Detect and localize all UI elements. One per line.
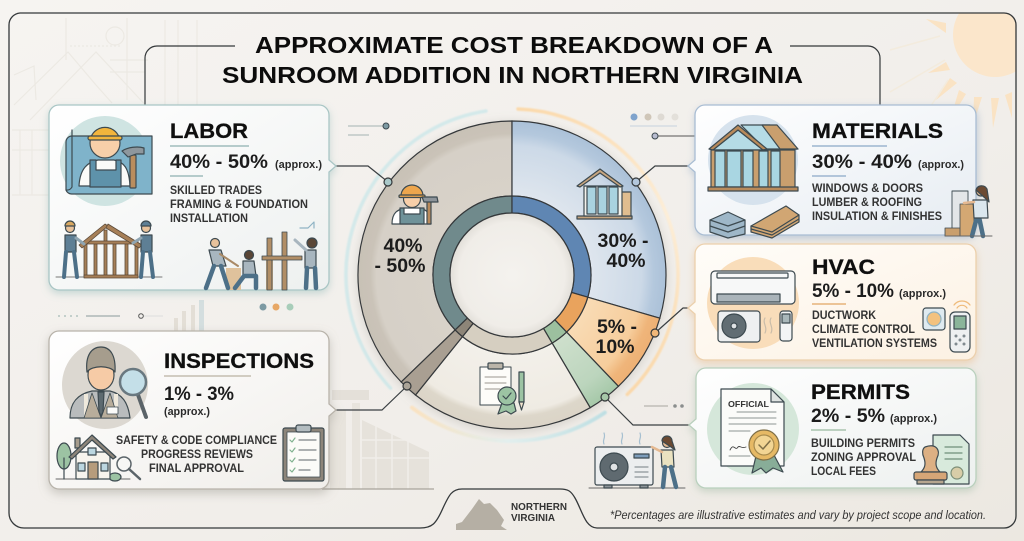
percentage: hvac [812,281,946,302]
segment: permits [552,332,618,408]
donut icon: sunroom house [577,169,632,219]
text: inspections items: PROGRESS REVIEWS [141,449,253,461]
title [222,32,803,88]
background house sketch [12,18,197,195]
badge: Northern Virginia: NORTHERN [511,502,567,513]
percentage: permits: 2% - 5% [811,406,885,427]
icon: house with magnifier [56,435,140,481]
percentage: labor: 40% - 50% [170,152,268,173]
donut label: materials [598,230,648,272]
text: inspections items: SAFETY & CODE COMPLIANCE [116,435,277,447]
donut icon: clipboard and ribbon [480,363,524,414]
segment: labor [358,121,512,382]
connectors [330,166,695,425]
segment: inspections [416,337,590,429]
center hole [450,213,574,337]
text: labor items [170,185,308,225]
text: labor items: SKILLED TRADES [170,185,262,197]
segment: hvac [567,297,660,386]
inner ring [433,196,591,354]
small bar decoration [174,300,204,331]
icon: inspector with magnifier [62,341,148,429]
panel: materials [688,105,992,238]
donut label: labor: 40% [383,235,423,257]
donut icon: worker [392,185,438,224]
text: permits items: LOCAL FEES [811,466,876,478]
percentage: hvac: 5% - 10% [812,281,894,302]
donut label: hvac: 5% - [597,316,637,338]
text: permits items [811,438,916,478]
icon: stamp and document [914,435,969,484]
illustration: outdoor HVAC unit with person [589,433,685,488]
heading: permits: PERMITS [811,381,910,404]
text: hvac items: DUCTWORK [812,310,877,322]
percentage: labor [170,152,322,173]
donut label: labor: - 50% [375,255,425,277]
text: hvac items: CLIMATE CONTROL [812,324,915,336]
percentage: permits [811,406,937,427]
permits card background [689,368,976,488]
materials card background [688,105,976,235]
illustration: workers building wall [206,222,317,290]
icon: material stacks [710,206,799,238]
icon: inspection clipboard [283,425,324,481]
percentage: hvac: (approx.) [899,288,946,300]
badge: Northern Virginia [456,499,567,530]
percentage: inspections: (approx.) [164,406,210,418]
text: labor items: FRAMING & FOUNDATION [170,199,308,211]
sun [890,14,1016,128]
illustration: person carrying materials [945,186,992,236]
panel: hvac [688,244,976,360]
text: inspections items [116,435,277,475]
text: materials items: INSULATION & FINISHES [812,211,942,223]
text: hvac items [812,310,937,350]
text: materials items [812,183,942,223]
footnote: *Percentages are illustrative estimates and vary by project scope and location. [610,510,986,522]
decorative dots and ticks [58,114,695,408]
hvac card background [688,244,976,360]
icon: sunroom [708,115,798,205]
icon: Virginia map [456,499,507,530]
percentage: materials: (approx.) [918,159,964,171]
connector nodes [384,178,659,401]
icon: thermostat and remote [923,301,970,352]
donut label: materials: 30% - [598,230,648,252]
text: hvac items: VENTILATION SYSTEMS [812,338,937,350]
text: inspections items: FINAL APPROVAL [149,463,244,475]
heading: labor: LABOR [170,120,248,143]
text: materials items: WINDOWS & DOORS [812,183,923,195]
donut chart [358,121,666,429]
illustration: workers framing a house [56,221,162,278]
text: permits items: ZONING APPROVAL [811,452,916,464]
text: materials items: LUMBER & ROOFING [812,197,922,209]
inspections card background [49,331,336,489]
percentage: inspections: 1% - 3% [164,384,234,405]
title bracket [145,46,880,105]
icon: worker on blueprint [60,116,152,206]
segment: other sliver [401,330,462,395]
icon: official document with seal [707,383,799,475]
title: APPROXIMATE COST BREAKDOWN OF A [255,32,773,58]
heading: inspections: INSPECTIONS [164,350,314,373]
donut label: hvac [595,316,637,358]
text: labor items: INSTALLATION [170,213,248,225]
background building sketch [322,390,434,489]
donut label: labor [375,235,425,277]
labor card background [49,105,336,290]
percentage: materials [812,152,964,173]
title: SUNROOM ADDITION IN NORTHERN VIRGINIA [222,62,803,88]
percentage: labor: (approx.) [275,159,322,171]
percentage: permits: (approx.) [890,413,937,425]
panel: inspections [49,331,336,489]
heading: materials: MATERIALS [812,120,943,143]
icon: air conditioner [707,257,799,349]
donut label: materials: 40% [606,250,646,272]
percentage: materials: 30% - 40% [812,152,912,173]
panel: permits [689,368,976,488]
donut label: hvac: 10% [595,336,635,358]
segment: materials [512,121,666,318]
badge: Northern Virginia: VIRGINIA [511,513,555,524]
percentage: inspections [164,384,234,418]
heading: hvac: HVAC [812,256,875,279]
text: permits items: BUILDING PERMITS [811,438,915,450]
icon: official document with seal: OFFICIAL [728,399,769,409]
decorative glow ring [346,109,678,441]
panel: labor [49,105,336,290]
